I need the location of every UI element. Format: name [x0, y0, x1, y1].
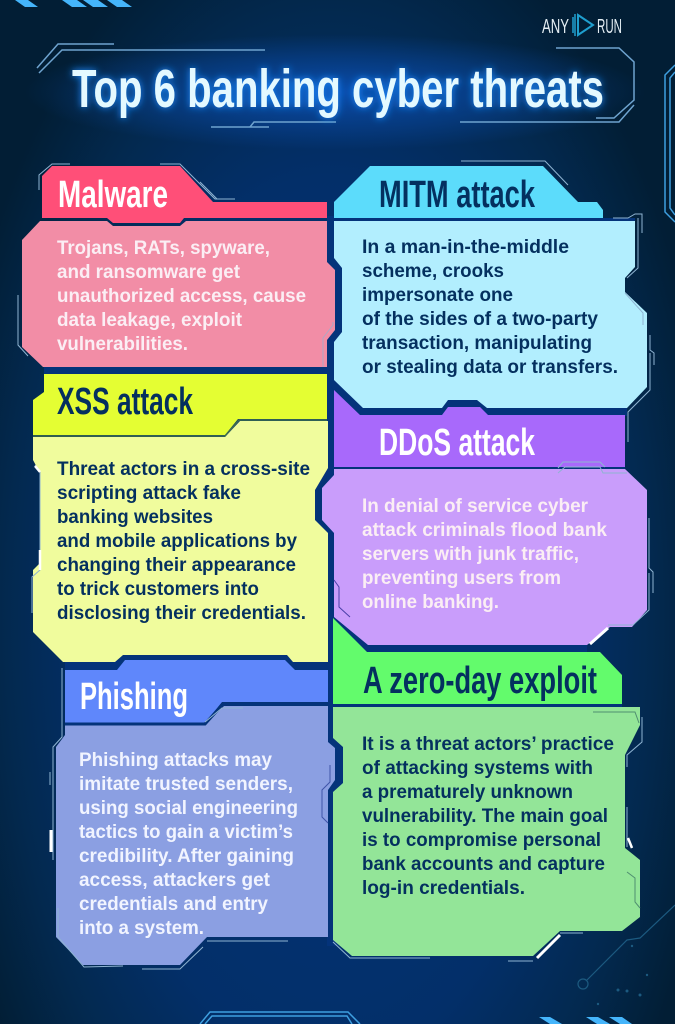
- Phishing text: into a system.: [79, 917, 204, 939]
- DDoS text: [362, 495, 607, 613]
- zero-day text: log-in credentials.: [362, 877, 525, 899]
- navy gaps between panels: [44, 216, 627, 946]
- MITM text: [362, 236, 618, 378]
- panel: MITM attack: [334, 161, 654, 442]
- panel: DDoS attack: [322, 390, 653, 645]
- panel: Malware: [18, 164, 335, 367]
- Malware text: unauthorized access, cause: [57, 285, 306, 307]
- DDoS text: online banking.: [362, 591, 499, 613]
- logo: ANY.RUN: RUN: [597, 16, 622, 38]
- DDoS text: servers with junk traffic,: [362, 543, 579, 565]
- XSS accent lines: [32, 465, 40, 613]
- DDoS text: preventing users from: [362, 567, 561, 589]
- zero-day accent lines: [333, 712, 642, 961]
- right edge frame: [665, 65, 675, 222]
- Phishing text: Phishing attacks may: [79, 749, 272, 771]
- zero-day text: a prematurely unknown: [362, 781, 573, 803]
- panel: XSS attack: [32, 374, 328, 662]
- title frame: [37, 44, 634, 127]
- zero-day text: of attacking systems with: [362, 757, 593, 779]
- MITM accent lines: [461, 161, 654, 442]
- Phishing text: imitate trusted senders,: [79, 773, 293, 795]
- MITM heading: MITM attack: [379, 174, 536, 216]
- XSS text: scripting attack fake: [57, 482, 241, 504]
- XSS body: [33, 421, 328, 662]
- XSS header: [33, 374, 327, 435]
- MITM text: or stealing data or transfers.: [362, 356, 618, 378]
- Phishing text: [79, 749, 298, 939]
- bottom frame: [200, 1012, 360, 1024]
- Malware text: data leakage, exploit: [57, 309, 242, 331]
- XSS text: Threat actors in a cross-site: [57, 458, 310, 480]
- Malware text: vulnerabilities.: [57, 333, 188, 355]
- DDoS text: In denial of service cyber: [362, 495, 588, 517]
- DDoS header: [334, 390, 625, 467]
- MITM text: transaction, manipulating: [362, 332, 592, 354]
- Malware body: [22, 221, 335, 367]
- panel: A zero-day exploit: [333, 618, 642, 961]
- XSS text: disclosing their credentials.: [57, 602, 306, 624]
- zero-day text: is to compromise personal: [362, 829, 601, 851]
- Phishing accent lines: [50, 668, 330, 969]
- Phishing header: [65, 660, 328, 723]
- zero-day body: [333, 707, 640, 956]
- circuit decoration: [578, 905, 675, 1005]
- zero-day text: bank accounts and capture: [362, 853, 605, 875]
- DDoS heading: DDoS attack: [379, 422, 536, 464]
- Phishing text: credibility. After gaining: [79, 845, 294, 867]
- Malware accent lines: [18, 164, 333, 367]
- Phishing text: tactics to gain a victim’s: [79, 821, 293, 843]
- XSS text: [57, 458, 310, 624]
- Malware header: [42, 166, 327, 223]
- XSS text: and mobile applications by: [57, 530, 297, 552]
- logo: ANY.RUN: [542, 14, 622, 38]
- XSS text: to trick customers into: [57, 578, 259, 600]
- Malware text: Trojans, RATs, spyware,: [57, 237, 270, 259]
- MITM text: In a man-in-the-middle: [362, 236, 569, 258]
- XSS text: changing their appearance: [57, 554, 296, 576]
- MITM text: of the sides of a two-party: [362, 308, 598, 330]
- bottom chevrons: [539, 1017, 632, 1024]
- Phishing text: access, attackers get: [79, 869, 270, 891]
- top chevrons: [15, 0, 132, 7]
- Phishing body: [56, 706, 335, 965]
- logo: ANY.RUN: ANY: [542, 16, 569, 38]
- Phishing text: using social engineering: [79, 797, 298, 819]
- Malware text: and ransomware get: [57, 261, 240, 283]
- Malware text: [57, 237, 306, 355]
- DDoS body: [322, 469, 647, 645]
- Phishing text: credentials and entry: [79, 893, 268, 915]
- panel: Phishing: [50, 660, 335, 969]
- Malware heading: Malware: [58, 174, 168, 216]
- Phishing heading: Phishing: [80, 676, 188, 718]
- DDoS accent lines: [334, 462, 653, 644]
- XSS text: banking websites: [57, 506, 213, 528]
- zero-day text: [362, 733, 614, 899]
- zero-day header: [333, 618, 622, 704]
- MITM header: [334, 166, 603, 218]
- MITM text: scheme, crooks: [362, 260, 504, 282]
- DDoS text: attack criminals flood bank: [362, 519, 607, 541]
- MITM body: [334, 221, 647, 408]
- XSS heading: XSS attack: [57, 381, 194, 423]
- zero-day text: It is a threat actors’ practice: [362, 733, 614, 755]
- MITM text: impersonate one: [362, 284, 513, 306]
- zero-day text: vulnerability. The main goal: [362, 805, 608, 827]
